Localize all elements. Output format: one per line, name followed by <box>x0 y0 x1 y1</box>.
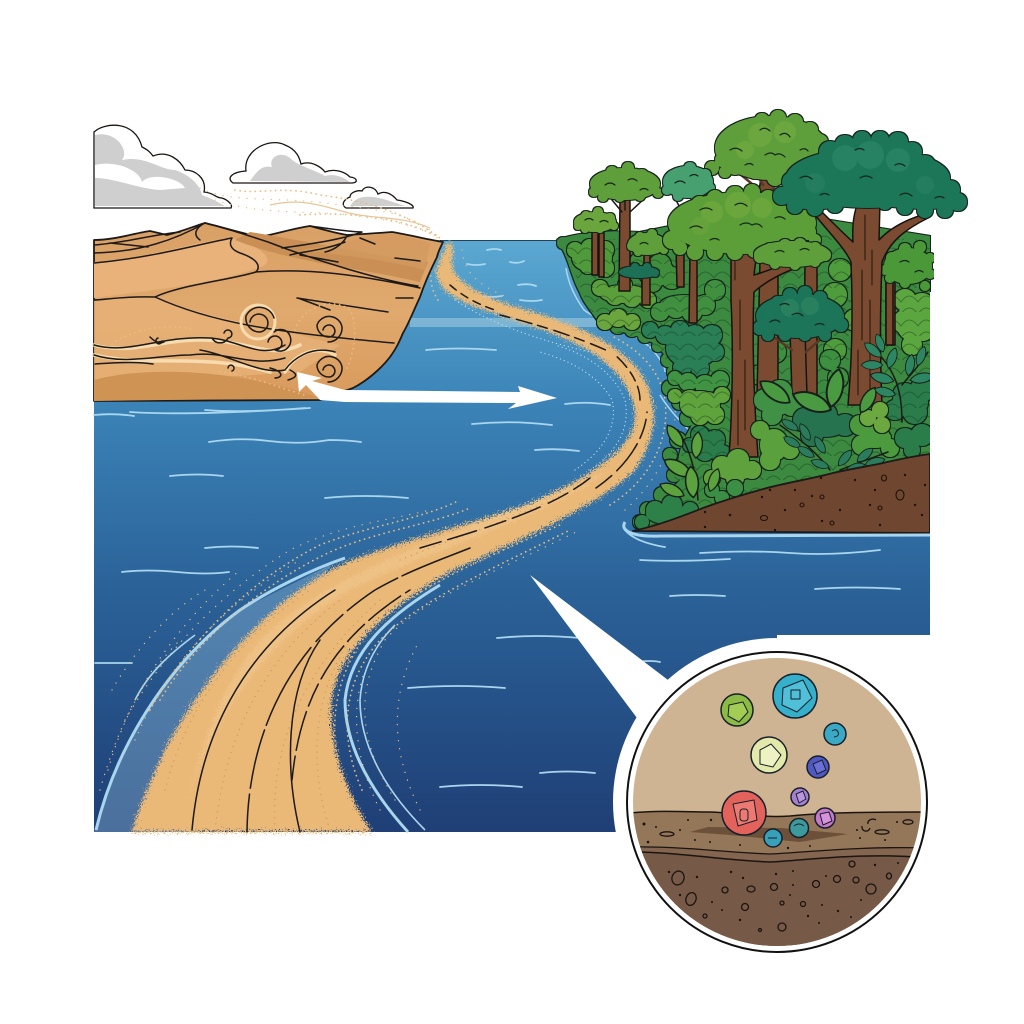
cloud left <box>94 125 231 208</box>
broad leaf plant lower left <box>658 422 723 500</box>
stream core highlight <box>180 470 610 832</box>
large teal crown <box>773 131 967 218</box>
tree: small mid crown <box>627 229 668 256</box>
desert cliff <box>94 223 443 401</box>
airborne dust plume <box>200 188 440 240</box>
tree: right edge crown <box>880 241 935 345</box>
pointer wedge to inset <box>530 575 668 722</box>
central tree side crown <box>754 238 831 270</box>
tree: far left crown <box>574 207 618 233</box>
ocean waves <box>94 249 900 787</box>
broad leaves centre <box>759 368 877 413</box>
wind swirls on dune <box>94 304 355 395</box>
tree: sea-green crown <box>662 162 715 201</box>
tree: large teal tree <box>773 131 967 405</box>
front bushes <box>635 380 933 529</box>
tree: mid teal tree <box>753 286 848 396</box>
tree: top green canopy <box>705 110 833 200</box>
sand speckle <box>100 245 675 810</box>
inset contents <box>630 655 930 960</box>
cloud right <box>343 187 413 208</box>
foliage scallop texture <box>565 228 930 525</box>
tree: central tall tree <box>663 184 831 457</box>
back bushes <box>567 239 934 465</box>
fern fronds above soil <box>780 417 888 475</box>
back trunks <box>592 195 895 396</box>
dune shading <box>94 238 267 298</box>
fern plant right <box>861 333 935 422</box>
sand stream flow lines <box>192 285 647 832</box>
stream edge light lines <box>96 558 440 832</box>
tree: light green crown left <box>589 162 663 202</box>
white arrow across the ocean <box>297 372 557 409</box>
cloud middle <box>230 143 356 183</box>
forest background mass with scalloped coast <box>557 212 930 533</box>
magnified soil inset <box>613 638 941 966</box>
soil bank <box>624 454 930 536</box>
mineral spheres <box>721 674 846 847</box>
dune ridge lines <box>94 223 420 343</box>
inset halo <box>613 638 941 966</box>
central tree crown <box>663 184 821 260</box>
shoreline foam <box>566 268 698 440</box>
rainforest <box>557 110 967 536</box>
ocean <box>94 240 930 832</box>
sand stream <box>132 243 654 832</box>
tree: small teal crown <box>619 263 659 305</box>
